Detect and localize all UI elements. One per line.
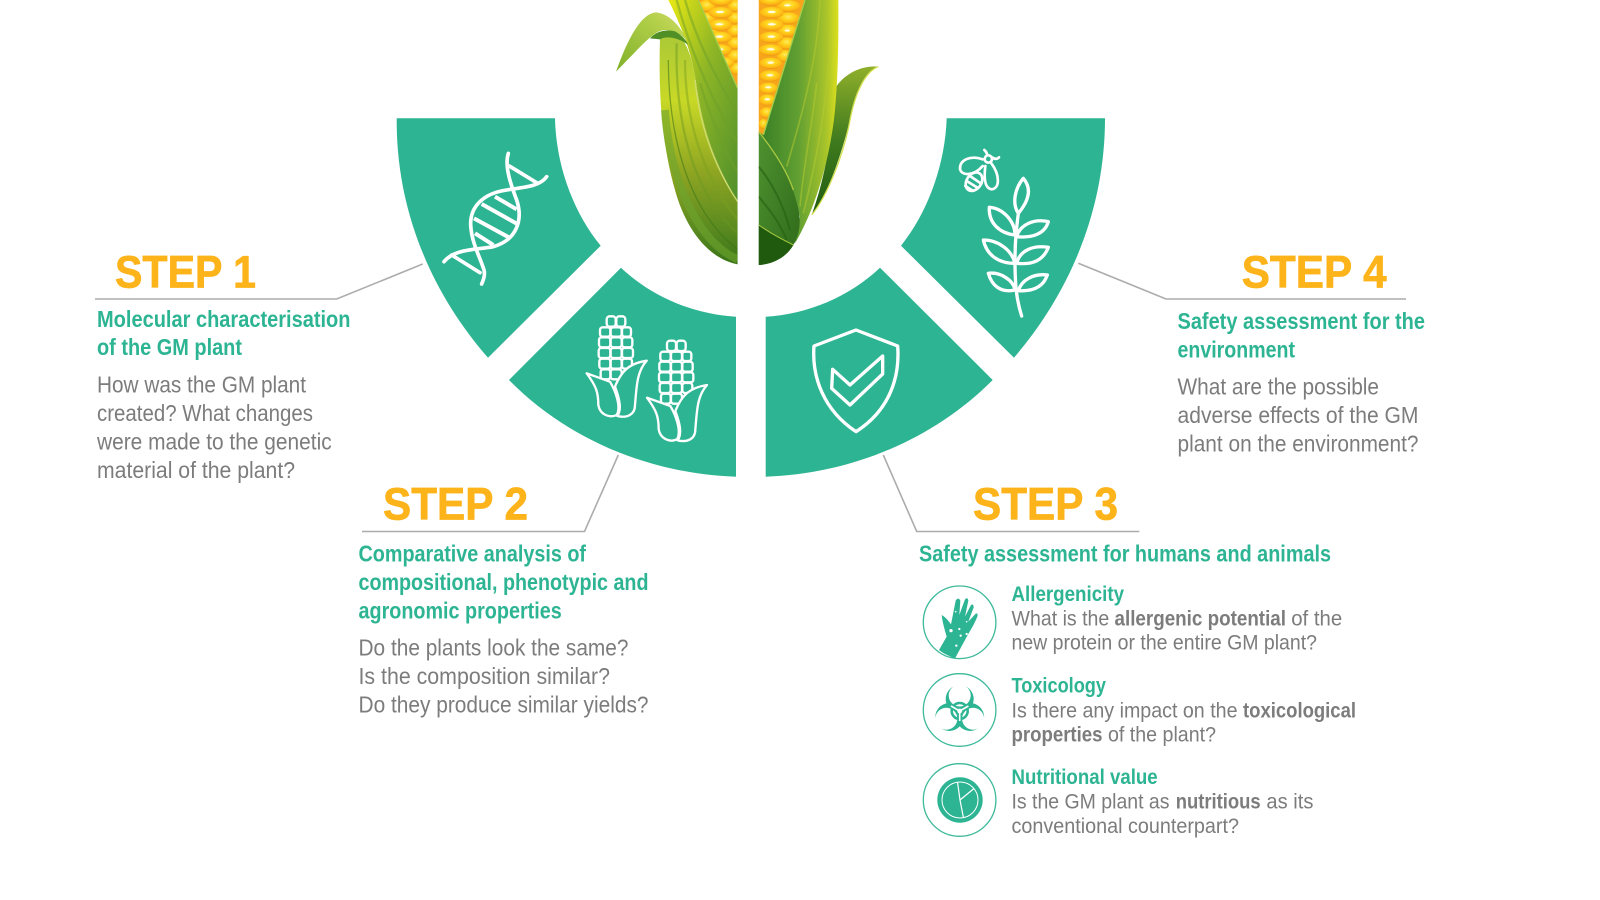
nutritional value text: conventional counterpart? [1012,814,1239,838]
step 2 heading [358,541,648,623]
icon: DNA helix [444,153,547,284]
front leaf [660,31,738,264]
step 4 heading [1178,308,1425,362]
allergenicity text: Allergenicity [1012,582,1124,606]
step 1 connector line [95,264,423,299]
step 1 heading: of the GM plant [97,334,242,360]
step 2 heading: compositional, phenotypic and [358,569,648,595]
nutritional value text: Is the GM plant as [1012,790,1170,814]
step 1 heading [97,306,350,360]
step 2 connector line [362,455,618,532]
step 1 body text: How was the GM plant [97,372,306,398]
step 1 body text: created? What changes [97,400,313,426]
allergenicity text: of the [1291,606,1342,630]
step 1 heading: Molecular characterisation [97,306,350,332]
step 2 callout [358,455,648,718]
step 3 heading: Safety assessment for humans and animals [919,541,1331,567]
panel: step 3 wedge with shield icon [766,268,993,477]
step 2 heading: agronomic properties [358,597,562,623]
icon: two corn cobs [587,316,707,441]
step 2 body text [358,634,648,718]
step 2 body text: Do the plants look the same? [358,634,628,660]
nutritional value text: nutritious [1176,790,1261,814]
step 4 heading: environment [1178,336,1295,362]
step 3 callout [883,455,1356,838]
step 4 body text [1178,374,1418,456]
step 2 heading: Comparative analysis of [358,541,586,567]
step 4 body text: What are the possible [1178,374,1379,400]
allergenicity text [1012,582,1342,654]
right half of corn [759,0,878,265]
icon: shield with check [814,330,898,432]
step 4 heading: Safety assessment for the [1178,308,1425,334]
nutritional value text: Nutritional value [1012,765,1158,789]
step 1 callout [95,246,423,483]
step 1 label: STEP 1 [115,246,256,298]
icon: plant sprig [983,178,1048,316]
toxicology text: properties [1012,722,1103,746]
back leaf [668,0,738,202]
step 2 body text: Is the composition similar? [358,663,610,689]
step 4 connector line [1078,263,1406,299]
step 4 label: STEP 4 [1242,246,1387,298]
panel: step 4 wedge with bee and plant icons [901,118,1105,358]
step 4 body text: plant on the environment? [1178,430,1418,456]
front right leaf [759,132,800,265]
icon: toxicology biohazard [923,674,996,746]
panel: step 1 wedge with DNA icon [397,118,601,358]
nutritional value text: as its [1266,790,1313,814]
toxicology text: toxicological [1243,698,1356,722]
step 4 body text: adverse effects of the GM [1178,402,1418,428]
step 4 callout [1078,246,1425,456]
allergenicity text: What is the [1012,606,1109,630]
panel: step 2 wedge with corn icons [509,268,736,477]
allergenicity text: allergenic potential [1114,606,1286,630]
main right leaf [759,0,838,243]
step 3 connector line [883,455,1139,532]
step 2 label: STEP 2 [383,478,528,530]
icon: bee [960,150,999,194]
toxicology text: Toxicology [1012,673,1106,697]
step 2 body text: Do they produce similar yields? [358,692,648,718]
toxicology text: Is there any impact on the [1012,698,1238,722]
back right leaf [812,66,878,215]
allergenicity text: new protein or the entire GM plant? [1012,630,1317,654]
toxicology text [1012,673,1356,746]
left half of corn [616,0,744,264]
step 3 label: STEP 3 [973,478,1118,530]
corn cob illustration [616,0,878,265]
icon: nutritional pie chart [923,764,996,836]
nutritional value text [1012,765,1313,838]
icon: allergenicity hand [923,586,996,659]
step 1 body text: material of the plant? [97,457,295,483]
leaf tip [616,12,688,72]
step 1 body text: were made to the genetic [96,428,332,454]
toxicology text: of the plant? [1108,722,1216,746]
step 1 body text [96,372,332,483]
